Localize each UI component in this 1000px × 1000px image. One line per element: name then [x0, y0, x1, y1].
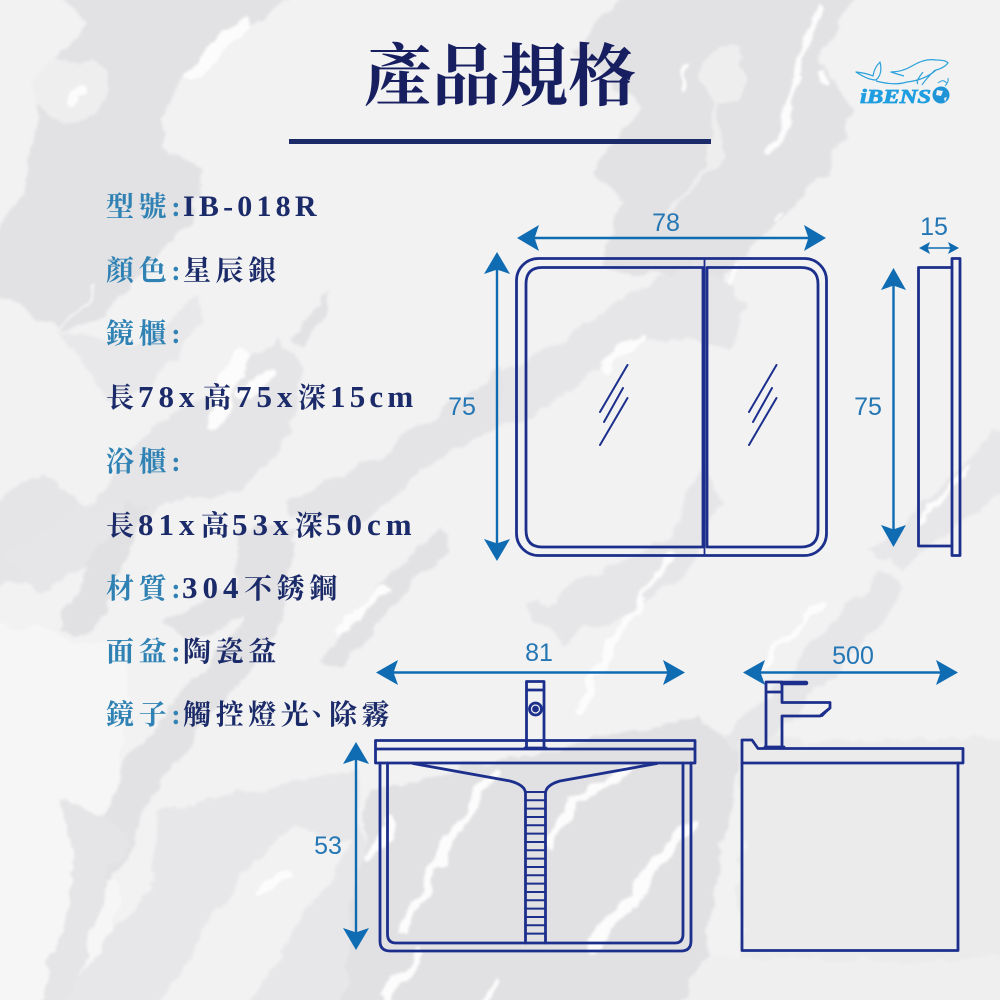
logo globe [932, 86, 950, 104]
spec: basin: 面盆: [106, 636, 185, 668]
spec: bath cabinet size: 深 [295, 510, 328, 542]
spec: basin: 陶瓷盆 [183, 636, 281, 668]
dimension: cabinet height 53: 53 [314, 832, 342, 860]
counter top [376, 740, 695, 763]
spec: material: 不銹鋼 [244, 573, 342, 605]
spec: mirror: 、 [303, 700, 336, 731]
dimension: mirror height 75: 75 [448, 393, 476, 421]
spec: mirror: 除霧 [329, 699, 394, 731]
pipe ribs [526, 792, 545, 934]
bath cabinet side view [742, 682, 963, 950]
dimension: mirror width 78 [517, 209, 826, 251]
spec: mirror: 鏡子: [106, 699, 185, 731]
spec: colour: 顏色: [106, 255, 185, 287]
spec: mirror cabinet size: 長 [106, 383, 139, 414]
counter side [742, 740, 963, 763]
logo dolphin outline [856, 60, 948, 85]
mirror cabinet side view [918, 258, 960, 556]
dimension: basin width 81 [376, 639, 685, 685]
spec: mirror cabinet label: 鏡櫃: [106, 318, 185, 350]
dimension: mirror depth 15 [919, 213, 959, 254]
spec: mirror cabinet size: 78x [138, 379, 200, 414]
spec: mirror: 觸控燈光 [183, 699, 313, 731]
dimension: depth 500 [743, 642, 958, 685]
dimension: depth 500: 500 [832, 642, 874, 670]
spec: bath cabinet size: 長 [106, 511, 139, 542]
spec: material: 材質: [106, 573, 185, 605]
spec: bath cabinet size: 53x [232, 507, 294, 542]
basin and drain pipe [413, 764, 657, 943]
cabinet body [380, 763, 691, 951]
spec list [106, 190, 417, 731]
spec: bath cabinet size: 高 [201, 510, 234, 542]
title underline [289, 139, 711, 144]
spec: bath cabinet label: 浴櫃: [106, 446, 185, 478]
mirror cabinet front view [516, 258, 826, 556]
spec: model: IB-018R [183, 190, 321, 223]
dimension: cabinet height 53 [314, 742, 369, 950]
title: 產品規格 [364, 39, 636, 115]
faucet front [525, 682, 546, 748]
spec: colour: 星辰銀 [183, 255, 281, 287]
logo: IBENSO dolphin [856, 60, 950, 108]
bath cabinet front view [376, 682, 695, 951]
faucet side [765, 682, 830, 748]
spec: bath cabinet size: 50cm [326, 507, 417, 542]
cabinet side body [742, 763, 958, 950]
spec: mirror cabinet size: 深 [298, 382, 331, 414]
dimension: mirror width 78: 78 [652, 209, 680, 237]
spec: mirror cabinet size: 75x [236, 379, 298, 414]
dimension: mirror height 75 side: 75 [854, 393, 882, 421]
dimension: mirror depth 15: 15 [920, 213, 948, 241]
spec: mirror cabinet size: 高 [203, 382, 236, 414]
spec: bath cabinet size: 81x [138, 507, 200, 542]
spec: model: 型號: [106, 191, 185, 223]
logo wordmark: iBENS [860, 86, 931, 108]
spec: mirror cabinet size: 15cm [330, 379, 417, 414]
dimension: basin width 81: 81 [525, 639, 553, 667]
dimension: mirror height 75 [448, 252, 510, 561]
dimension: mirror height 75 side [854, 268, 906, 547]
spec: material: 304 [182, 570, 244, 605]
